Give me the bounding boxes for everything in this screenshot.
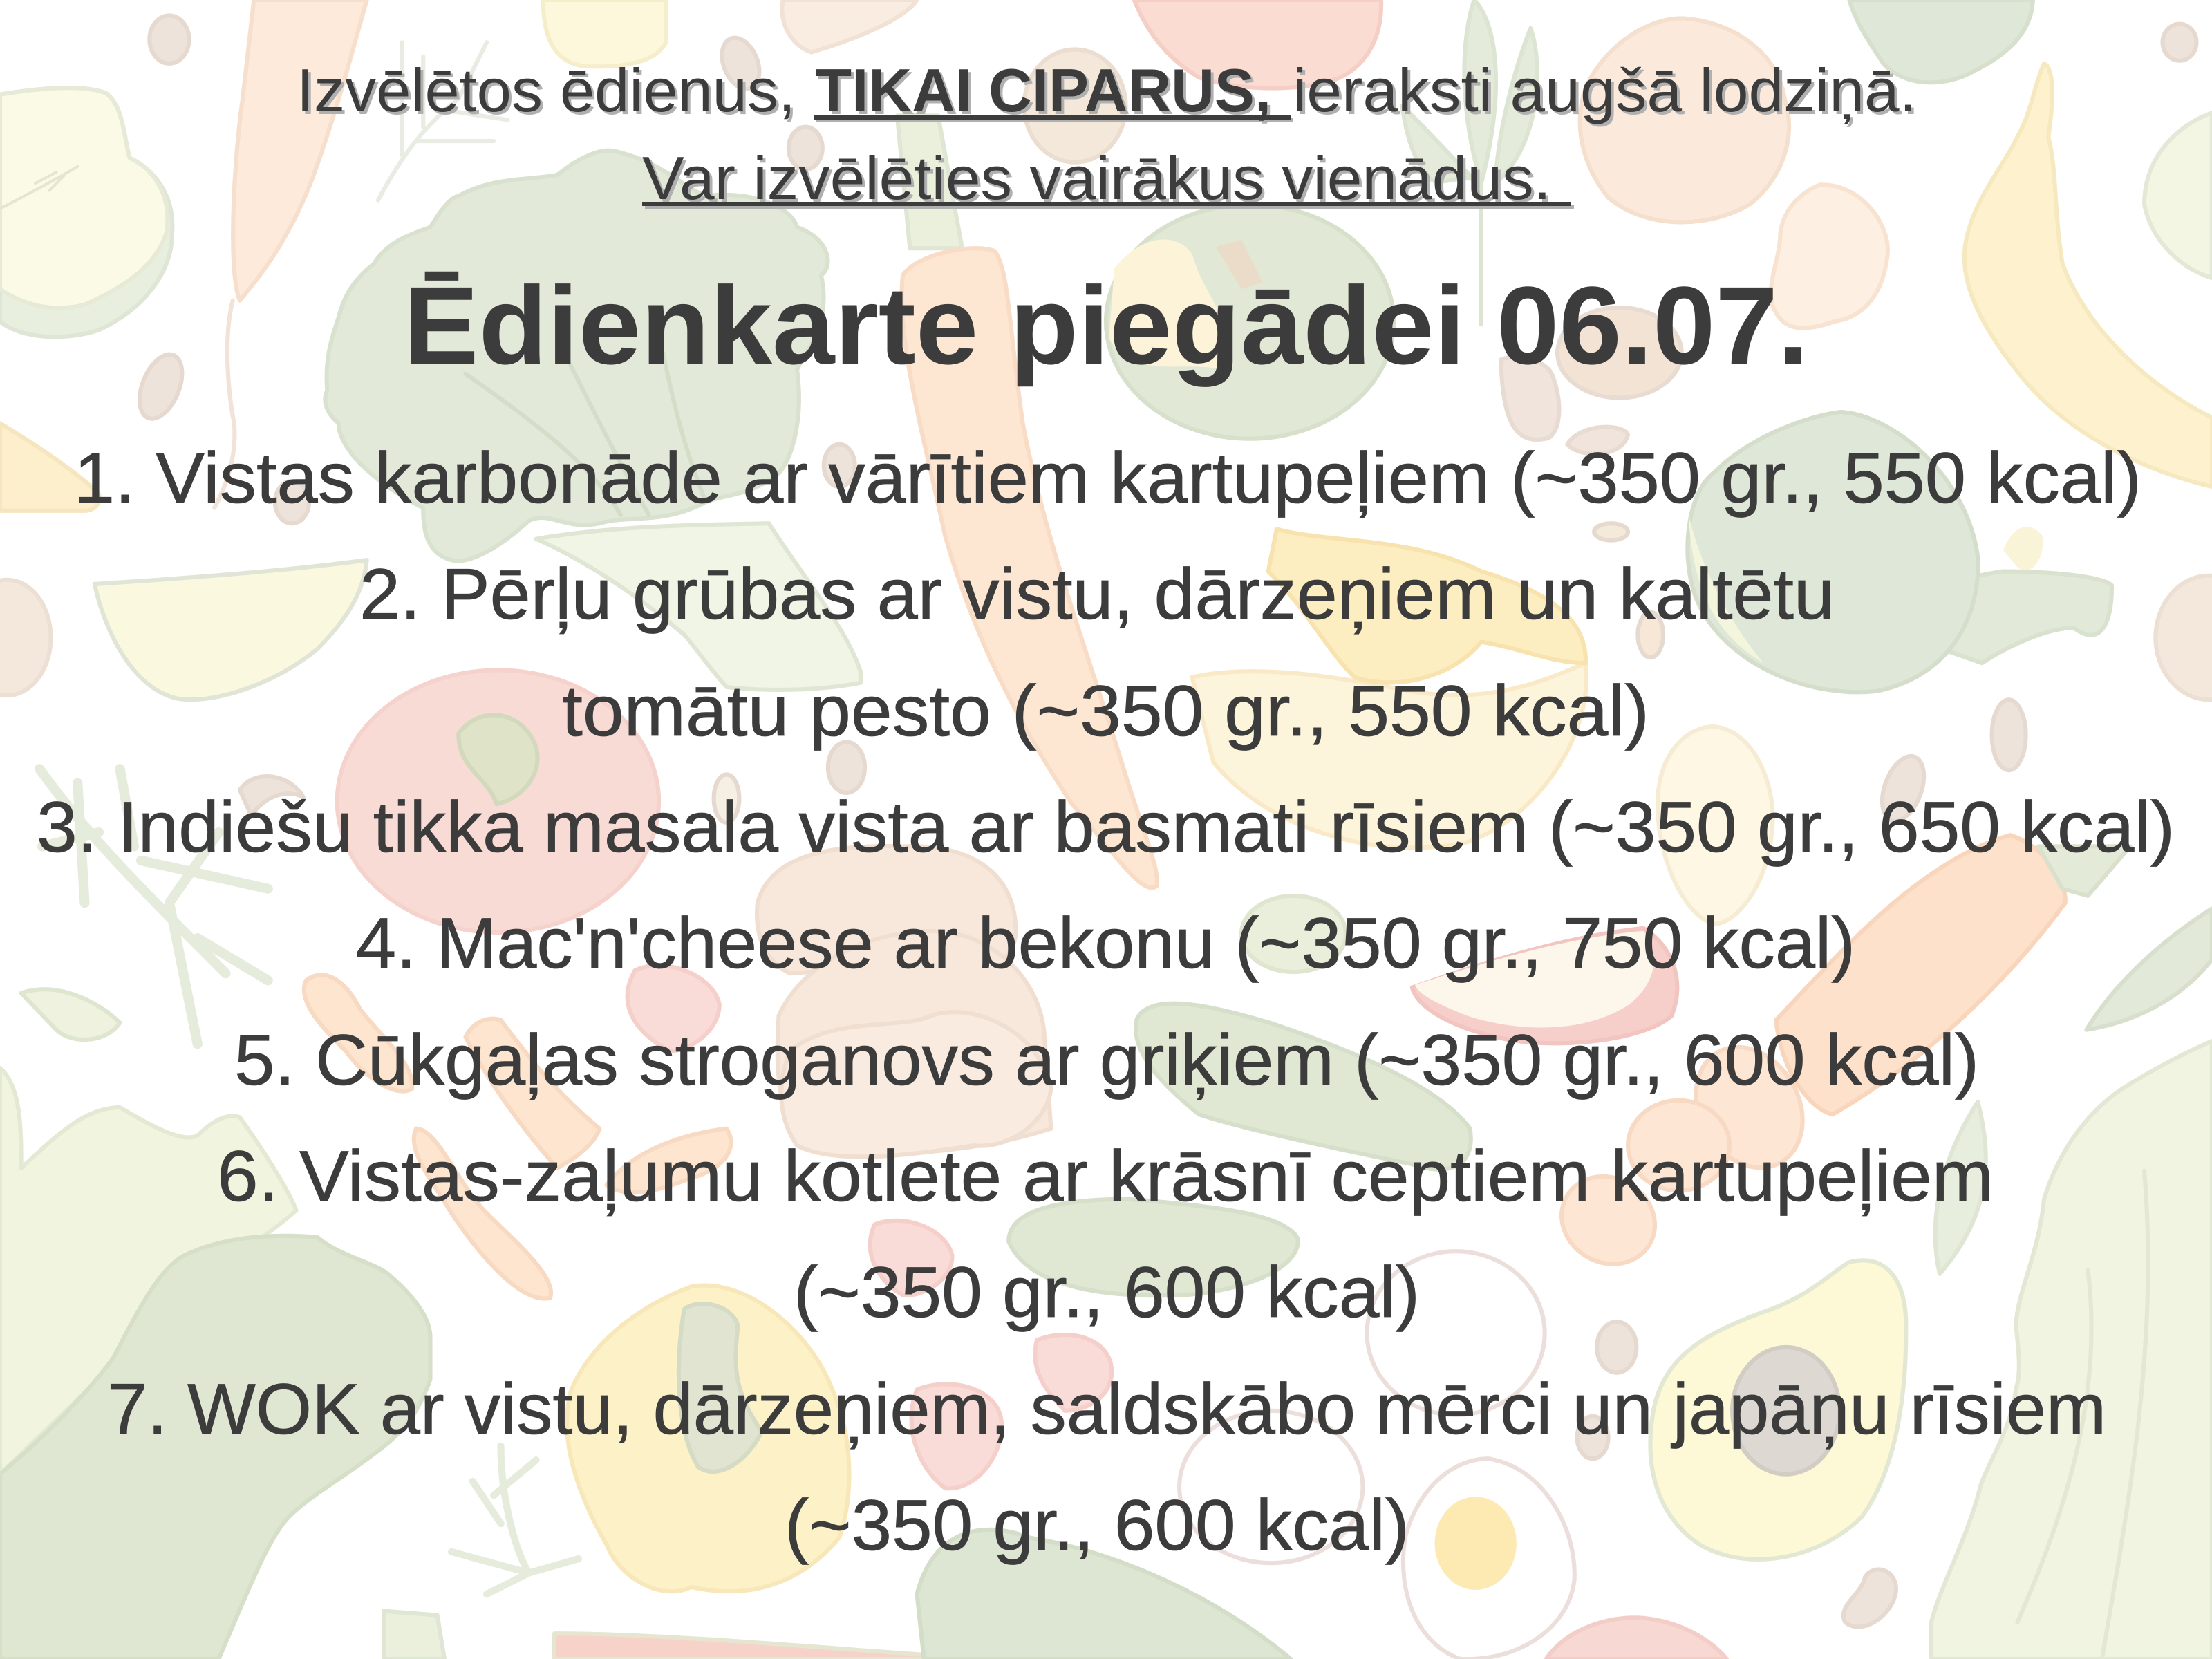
- banana peel and banana, center: [1192, 529, 1586, 847]
- potato, top: [543, 0, 666, 66]
- menu item 6, first line: 6. Vistas-zaļumu kotlete ar krāsnī ceptiem kartupeļiem: [217, 1136, 1994, 1217]
- menu item 2, first line: 2. Pērļu grūbas ar vistu, dārzeņiem un kaltētu: [359, 554, 1835, 635]
- cucumber middle: [1009, 1199, 1298, 1295]
- leaf upper right: [2086, 908, 2212, 1030]
- carrot strips: [304, 975, 731, 1299]
- potato right: [2155, 576, 2212, 700]
- mandarin: [1580, 18, 1789, 222]
- broccoli: [325, 151, 861, 690]
- menu list: [37, 438, 2175, 1566]
- tomato: [337, 670, 659, 932]
- garlic clove: [1658, 727, 1773, 924]
- large carrot right: [1776, 835, 2130, 1114]
- red pepper, top: [1134, 0, 1381, 88]
- small leaf, left: [21, 989, 120, 1040]
- instruction line 1: TIKAI CIPARUS,: [815, 56, 1271, 124]
- boiled egg: [1403, 1459, 1575, 1659]
- yellow carrot piece, left: [0, 423, 100, 511]
- menu item 6, second line: (~350 gr., 600 kcal): [794, 1253, 1420, 1333]
- menu item 2, second line: tomātu pesto (~350 gr., 550 kcal): [562, 671, 1649, 751]
- instruction line 1: ieraksti augšā lodziņā.: [1293, 56, 1917, 124]
- banana, right: [1965, 64, 2212, 487]
- instruction line 1: [297, 56, 1917, 124]
- carrot, top left: [214, 0, 367, 508]
- instruction line 2: Var izvēlēties vairākus vienādus.: [642, 144, 1551, 212]
- menu item 5: 5. Cūkgaļas stroganovs ar griķiem (~350 gr., 600 kcal): [234, 1020, 1979, 1100]
- tomato fragment bottom: [1546, 1618, 1727, 1659]
- mandarin segments: [1771, 185, 1888, 328]
- instruction line 1: Izvēlētos ēdienus,: [297, 56, 796, 124]
- dill sprig: [378, 42, 508, 200]
- small herb sprig, bottom: [451, 1446, 579, 1594]
- big center carrot: [902, 248, 1157, 888]
- green apple, center: [1106, 205, 1394, 439]
- radish slice: [1412, 928, 1677, 1043]
- sliced sausage: [1024, 49, 1126, 162]
- menu item 7, second line: (~350 gr., 600 kcal): [785, 1485, 1409, 1566]
- avocado: [1650, 1260, 1906, 1559]
- strawberries: [628, 966, 1112, 1488]
- menu item 7, first line: 7. WOK ar vistu, dārzeņiem, saldskābo mērci un japāņu rīsiem: [107, 1369, 2106, 1450]
- leek stalks at carrot top: [897, 115, 962, 248]
- apple half, top left: [0, 88, 172, 337]
- apple slice: [95, 560, 367, 700]
- title: Ēdienkarte piegādei 06.07.: [404, 263, 1809, 387]
- rosemary sprig: [39, 769, 268, 1044]
- green apple, top right fragment: [1849, 0, 2033, 82]
- yellow pepper: [567, 1286, 849, 1591]
- narrow leaf: [1936, 1102, 1986, 1274]
- lettuce, right: [1931, 1041, 2212, 1659]
- cucumber upper right: [1136, 1004, 1471, 1169]
- menu item 1: 1. Vistas karbonāde ar vārītiem kartupeļiem (~350 gr., 550 kcal): [74, 438, 2141, 518]
- walnuts: [1501, 308, 1682, 454]
- potato left: [0, 580, 50, 695]
- leek bottom: [384, 1611, 444, 1659]
- watermelon slice bottom: [554, 1633, 988, 1659]
- menu item 3: 3. Indiešu tikka masala vista ar basmati rīsiem (~350 gr., 650 kcal): [37, 787, 2175, 868]
- artichoke: [1687, 412, 2112, 692]
- menu item 4: 4. Mac'n'cheese ar bekonu (~350 gr., 750 kcal): [356, 903, 1855, 984]
- carrot slices: [1546, 1028, 1824, 1281]
- pizza slice, top: [782, 0, 917, 53]
- sage sprig: [1403, 0, 1537, 324]
- mozzarella balls: [1179, 1251, 1545, 1563]
- bread slices: [757, 846, 1051, 1156]
- lettuce, left: [0, 1068, 430, 1659]
- kiwi slice: [1241, 896, 1346, 972]
- zucchini bottom: [917, 1530, 1291, 1659]
- apple half, right: [2144, 113, 2212, 278]
